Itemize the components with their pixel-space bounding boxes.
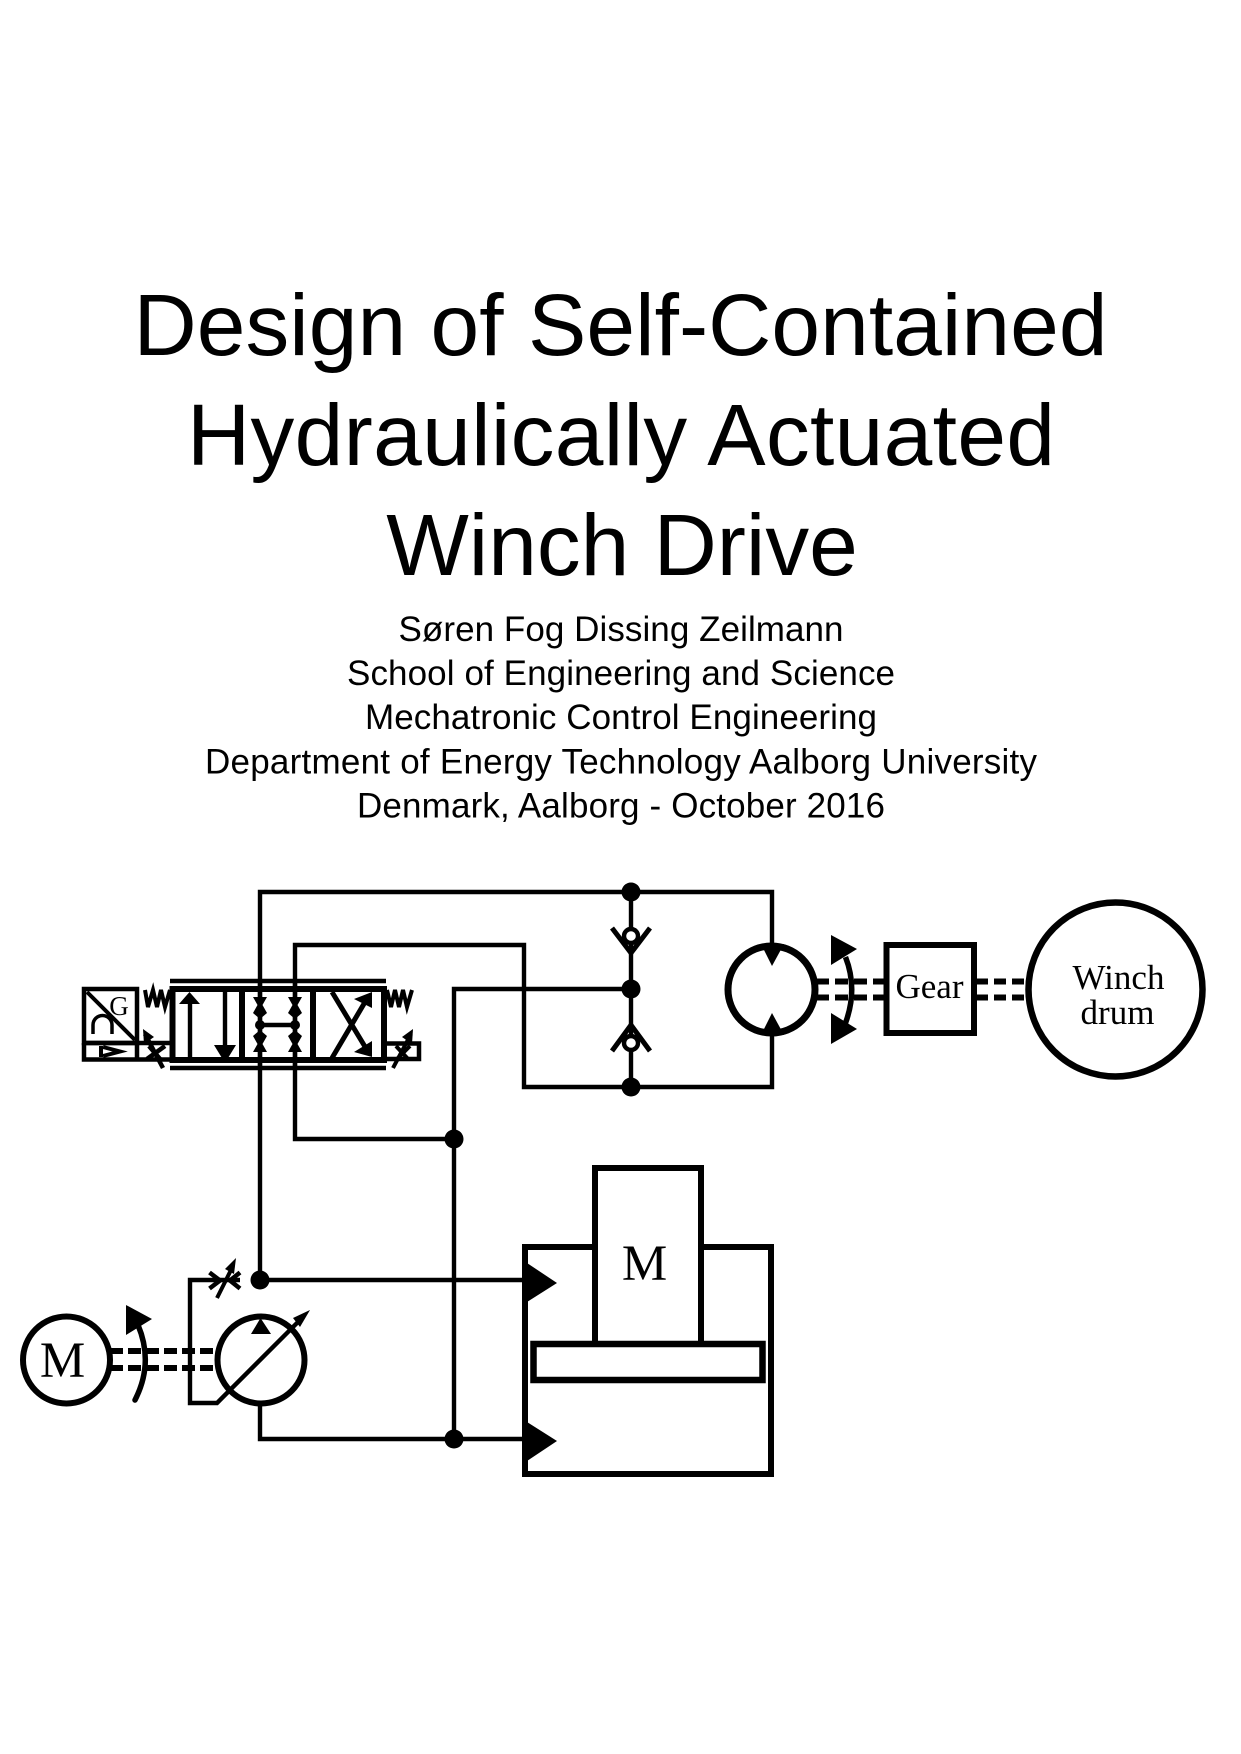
rotation arrow at motor shaft [831, 935, 857, 1044]
author and affiliation block: Mechatronic Control Engineering [365, 698, 877, 737]
rotation arrow at pump shaft [126, 1305, 152, 1400]
winch drum [1028, 902, 1202, 1076]
shaft motor to gear [816, 982, 886, 998]
directional control valve [170, 980, 386, 1070]
winch drum: Winch [1073, 958, 1165, 997]
shaft gear to drum [976, 982, 1028, 998]
left adjustable restrictor [143, 1029, 165, 1068]
author and affiliation block [205, 610, 1038, 826]
author and affiliation block: Department of Energy Technology Aalborg University [205, 742, 1038, 782]
title: Winch Drive [386, 496, 858, 594]
check valve upper [612, 928, 650, 953]
author and affiliation block: School of Engineering and Science [347, 654, 895, 693]
title: Design of Self-Contained [134, 276, 1108, 374]
right adjustable restrictor [386, 1029, 419, 1068]
pump restrictor [210, 1258, 240, 1298]
hydraulic motor [728, 944, 815, 1035]
gear box: Gear [895, 967, 964, 1006]
title: Hydraulically Actuated [187, 386, 1055, 484]
title [134, 276, 1108, 594]
hydraulic circuit diagram [23, 882, 1202, 1474]
author and affiliation block: Denmark, Aalborg - October 2016 [357, 786, 885, 826]
solenoid and pilot box: G [109, 991, 129, 1021]
hydraulic lines [260, 892, 772, 1439]
junction dots [250, 882, 640, 1448]
right spring [387, 990, 412, 1007]
winch drum: drum [1081, 993, 1154, 1032]
check valve lower [612, 1025, 650, 1051]
solenoid and pilot box [84, 989, 172, 1060]
variable pump [190, 1280, 310, 1404]
author and affiliation block: Søren Fog Dissing Zeilmann [398, 610, 844, 649]
left spring [145, 990, 170, 1007]
gear box [886, 945, 974, 1033]
shaft motor to pump [110, 1351, 218, 1368]
electric motor M [23, 1316, 110, 1404]
hydraulic cylinder with load: M [622, 1236, 667, 1292]
electric motor M: M [40, 1333, 85, 1389]
hydraulic cylinder with load [525, 1168, 771, 1474]
